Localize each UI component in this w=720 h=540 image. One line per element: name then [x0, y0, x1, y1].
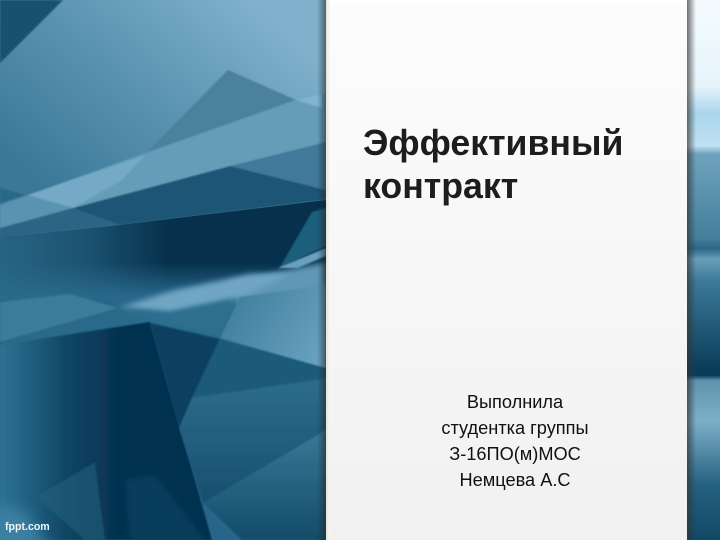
text block: author: студентка группы — [441, 418, 589, 438]
bottom right facet — [203, 430, 326, 540]
left sky — [0, 0, 326, 240]
light facets right of dark band — [280, 208, 326, 267]
right light fill under band — [230, 262, 326, 305]
bottom left glow — [0, 505, 50, 540]
facet to the right — [192, 339, 326, 398]
left small dark wedge — [0, 188, 26, 203]
dark triangle — [150, 323, 220, 428]
dark central mass — [0, 322, 212, 540]
logo text: fppt.com — [5, 521, 50, 533]
light band — [28, 93, 326, 208]
panel shadows — [317, 0, 326, 540]
bottom centre strip — [125, 475, 205, 540]
facet under sweep — [118, 298, 240, 338]
mid/lower base — [0, 235, 326, 540]
soft light sweep — [118, 274, 290, 312]
left lightening of dark band — [0, 219, 170, 300]
upper-left lower facet — [0, 294, 118, 342]
darkest band — [0, 200, 326, 296]
title: Эффективный — [363, 123, 623, 163]
panel: white content column — [326, 0, 687, 540]
title — [363, 123, 623, 206]
text block: author: Выполнила — [467, 392, 563, 412]
left band part — [0, 195, 73, 228]
pyramid — [146, 70, 296, 153]
top-left dark triangle — [0, 0, 63, 63]
title: контракт — [363, 166, 518, 206]
light facet right — [220, 285, 326, 368]
right lower facet — [179, 380, 326, 503]
text block: author: З-16ПО(м)МОС — [449, 444, 581, 464]
left lower facet — [0, 208, 120, 238]
dark blue facet — [73, 166, 326, 225]
bottom left faint triangle — [36, 462, 105, 540]
right strip — [687, 0, 720, 540]
text block: author: Немцева А.С — [459, 470, 571, 490]
right band shade — [230, 142, 326, 190]
text block: author — [441, 392, 589, 490]
panel edge highlight — [326, 0, 330, 540]
